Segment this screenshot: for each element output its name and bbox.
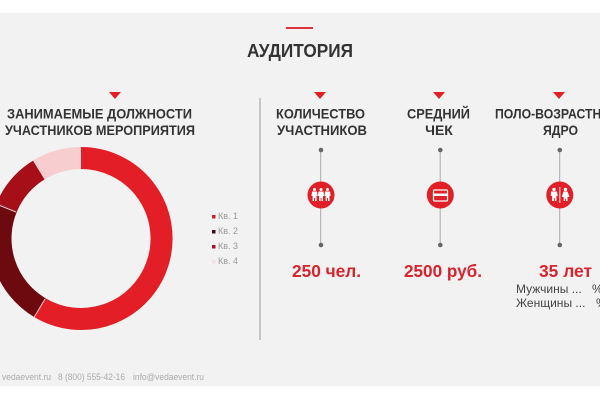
title: [247, 27, 353, 61]
timeline connector: [438, 148, 443, 247]
gender share text: [516, 282, 600, 310]
footer contacts: vedaevent.ru: [2, 372, 51, 382]
icon: man and woman: [546, 182, 573, 208]
footer contacts: info@vedaevent.ru: [133, 372, 204, 382]
heading: average check: ЧЕК: [425, 122, 453, 138]
value: average check: 2500 руб.: [404, 261, 482, 281]
footer contacts: 8 (800) 555-42-16: [58, 372, 125, 382]
icon: people: [308, 182, 334, 208]
panel: average check: [404, 92, 482, 281]
value: participants: 250 чел.: [292, 261, 361, 281]
footer contacts: [2, 372, 204, 382]
panel: gender and age core: [495, 92, 600, 310]
legend: [212, 211, 238, 266]
legend: Кв. 4: [218, 256, 238, 266]
legend: Кв. 2: [218, 226, 238, 236]
panel: participants count: [276, 92, 367, 281]
heading: participants count: [276, 106, 367, 138]
panel: positions: [0, 92, 238, 319]
icon: heading marker: [109, 92, 121, 99]
icon: heading marker: [553, 92, 565, 99]
icon: heading marker: [433, 92, 445, 99]
title: АУДИТОРИЯ: [247, 41, 353, 61]
timeline connector: [558, 148, 562, 247]
donut chart: [0, 158, 162, 319]
heading: average check: СРЕДНИЙ: [407, 104, 470, 122]
heading: positions: ЗАНИМАЕМЫЕ ДОЛЖНОСТИ: [7, 106, 192, 122]
legend: Кв. 1: [218, 211, 238, 221]
timeline connector: [319, 148, 323, 247]
heading: participants count: УЧАСТНИКОВ: [277, 122, 367, 138]
heading: average check: [407, 104, 470, 138]
heading: positions: УЧАСТНИКОВ МЕРОПРИЯТИЯ: [5, 122, 195, 138]
heading: positions: [5, 106, 195, 138]
icon: card: [427, 182, 454, 208]
gender share text: Женщины ...: [516, 296, 585, 310]
icon: heading marker: [314, 92, 326, 99]
heading: gender and age core: ЯДРО: [543, 122, 578, 138]
legend: Кв. 3: [218, 241, 238, 251]
gender share text: Мужчины ...: [516, 282, 582, 296]
heading: gender and age core: [495, 106, 600, 138]
heading: participants count: КОЛИЧЕСТВО: [276, 106, 365, 122]
value: average age: 35 лет: [539, 261, 592, 281]
